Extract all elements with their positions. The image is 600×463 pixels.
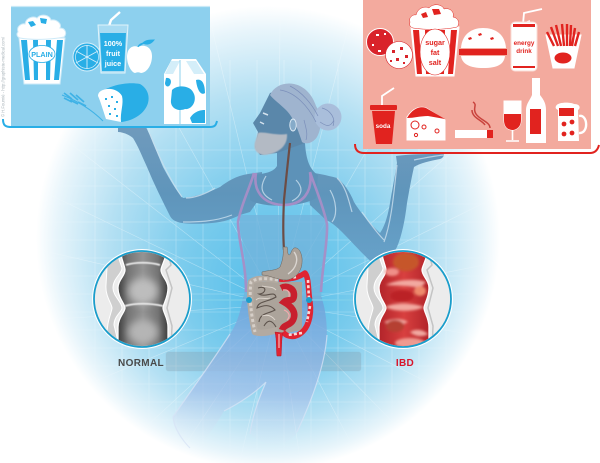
circle: normal colon [92, 248, 192, 350]
credit: vertical: © H.Fournié - http://graphiste-medical.com/ [0, 36, 6, 117]
icon: fruit juice glass [98, 12, 128, 73]
figure: eye highlight [260, 113, 268, 124]
background perspective grid [71, 43, 466, 441]
grey bars behind the labels [166, 352, 361, 371]
icon: burger [459, 28, 507, 68]
figure: torso interior [240, 215, 327, 300]
icon: wine bottle [526, 78, 546, 143]
icon: french fries [546, 24, 581, 68]
small intestine: grey loops [257, 287, 276, 327]
figure: left arm and shoulder [118, 127, 262, 224]
connector: normal [190, 297, 252, 303]
small intestine base [252, 282, 302, 334]
icon: plain popcorn [17, 15, 66, 84]
icon: beer mug [556, 103, 586, 141]
icon: wheat [62, 93, 103, 121]
figure: hair [270, 83, 321, 143]
icon: plain popcorn: PLAIN [31, 50, 53, 59]
icon: wine glass [504, 101, 521, 141]
figure: skirt [173, 296, 327, 452]
icon: sugar fat salt popcorn: salt [429, 58, 442, 67]
stomach [262, 247, 302, 280]
icon: fruit juice glass: fruit [106, 49, 121, 58]
label: normal: NORMAL [118, 358, 164, 369]
figure: bun [314, 104, 342, 130]
figure: right arm and shoulder [306, 154, 444, 268]
icon: sugar fat salt popcorn: fat [431, 48, 440, 57]
figure: ear [290, 119, 296, 131]
small intestine: red half [281, 287, 294, 330]
icon: orange slice [73, 43, 101, 71]
icon: energy drink can: drink [516, 48, 532, 55]
icon: cookies [366, 28, 412, 68]
label: IBD: IBD [396, 358, 414, 369]
large intestine: red colon [279, 273, 310, 336]
figure: head [253, 86, 310, 155]
figure: chest and neck [250, 143, 318, 206]
icon: apple [127, 40, 154, 73]
connector: IBD [306, 297, 356, 303]
icon: soda cup [370, 88, 397, 144]
rectum [275, 332, 283, 356]
figure: muscle highlights [150, 134, 444, 242]
human figure [118, 83, 444, 452]
icon: sugar fat salt popcorn [410, 5, 459, 76]
icon: sugar fat salt popcorn: sugar [425, 38, 445, 47]
circle: IBD colon [353, 248, 453, 350]
icon: milk carton [164, 59, 206, 124]
figure: esophagus [283, 143, 290, 250]
panel: unhealthy foods [355, 0, 599, 153]
icon: fruit juice glass: 100% [104, 39, 123, 48]
digestive system [250, 247, 310, 356]
icon: fruit juice glass: juice [104, 59, 121, 68]
figure: beard [254, 133, 287, 155]
icon: cheese [407, 107, 445, 140]
figure: tank top outline [238, 172, 327, 292]
icon: bread loaf [98, 83, 149, 122]
icon: energy drink can: energy [514, 40, 535, 47]
tray bracket: healthy [3, 119, 217, 127]
colon: grey half [250, 279, 278, 333]
tray bracket: unhealthy [355, 144, 599, 153]
icon: energy drink can [511, 9, 542, 71]
icon: soda cup: soda [376, 123, 391, 130]
panel: healthy foods [3, 6, 217, 127]
figure: hair strands [280, 86, 334, 140]
icon: cigarette [455, 102, 493, 138]
